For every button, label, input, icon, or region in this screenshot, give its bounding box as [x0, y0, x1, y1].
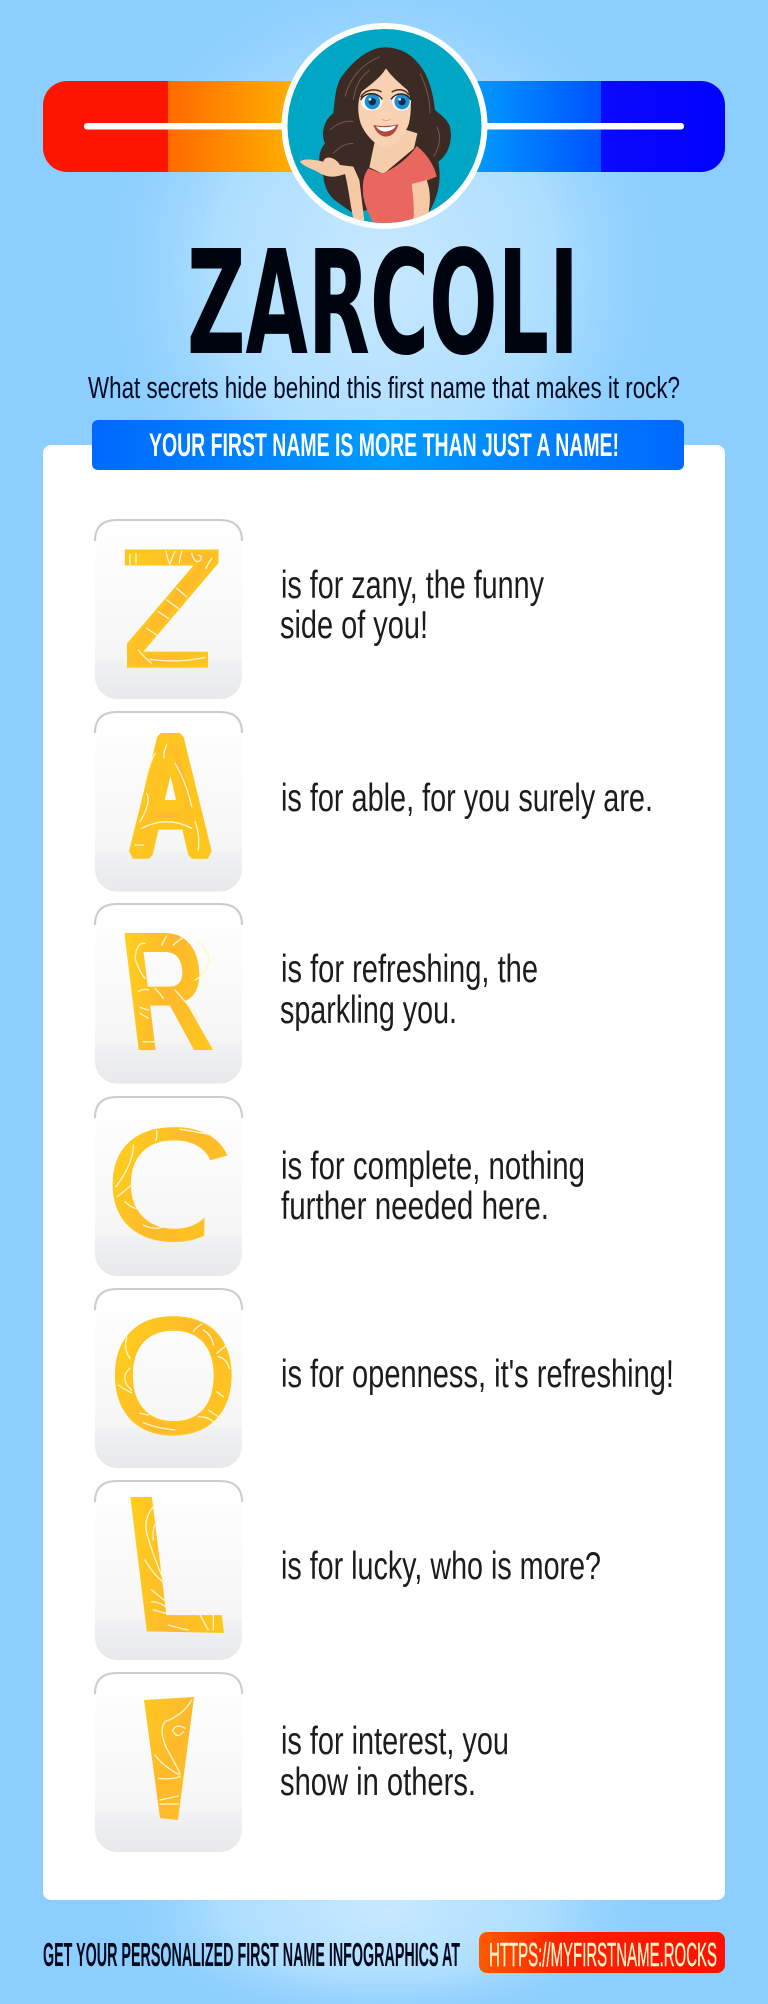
card: O tile: O: [108, 1284, 239, 1469]
header gradient bar: [43, 81, 725, 172]
row: letter A: [95, 704, 653, 892]
text: C line: [281, 1145, 585, 1228]
text: I line: is for interest, you: [281, 1720, 509, 1763]
card: I tile: [94, 1672, 243, 1852]
row: letter L: [94, 1480, 600, 1660]
card: A tile: [95, 704, 242, 892]
row: letter O: [95, 1284, 674, 1469]
card: L tile: [94, 1480, 243, 1660]
card: Z tile: Z: [114, 516, 227, 702]
text: C line: further needed here.: [281, 1185, 549, 1228]
text: R line: sparkling you.: [280, 989, 457, 1032]
banner: your first name: [92, 420, 684, 470]
row: letter R: [95, 897, 538, 1087]
row: letter C: [95, 1095, 585, 1276]
text: R line: is for refreshing, the: [281, 948, 538, 991]
text: Z line: [280, 564, 544, 647]
text: Z line: side of you!: [280, 604, 428, 647]
text: R line: [280, 948, 538, 1032]
text: Z line: is for zany, the funny: [281, 564, 544, 607]
text: I line: show in others.: [280, 1761, 476, 1804]
text: C line: is for complete, nothing: [281, 1145, 585, 1188]
card: R tile: R: [112, 897, 220, 1087]
card: C tile: C: [104, 1095, 235, 1275]
panel: white letter list: [43, 445, 725, 1900]
row: letter I: [94, 1672, 507, 1852]
card: L tile: L: [115, 1454, 235, 1682]
text: L line: is for lucky, who is more?: [281, 1545, 601, 1588]
text: I line: [280, 1720, 509, 1804]
icon: woman portrait medallion: [284, 26, 484, 226]
row: letter Z: [95, 516, 544, 702]
card: I tile: I: [112, 1654, 229, 1866]
card: A tile: A: [130, 704, 211, 889]
